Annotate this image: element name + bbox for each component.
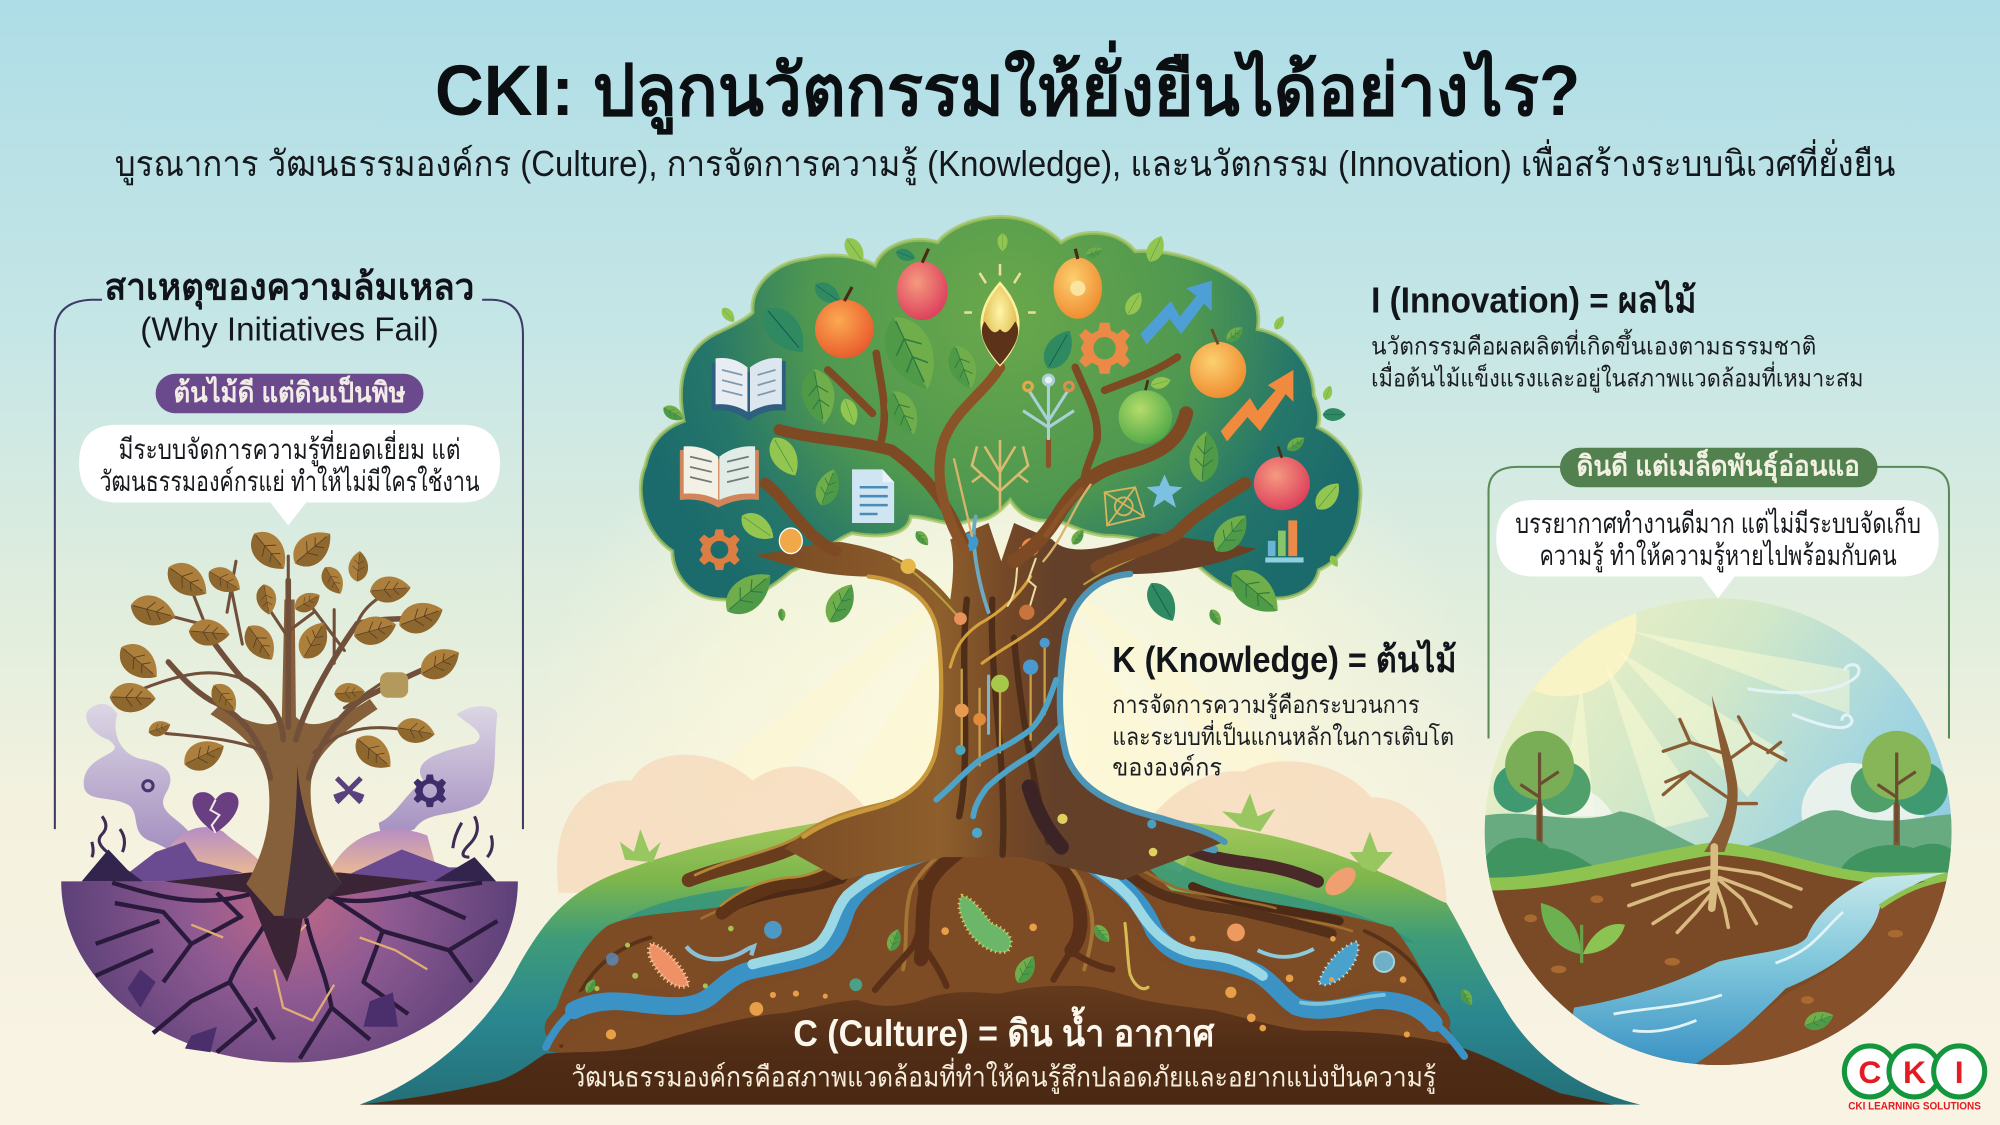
icon: crossed swords (334, 778, 364, 802)
text: knowledge: และระบบที่เป็นแกนหลักในการเติบโต (1112, 720, 1454, 751)
river right (1036, 833, 1434, 1023)
text: culture: วัฒนธรรมองค์กรคือสภาพแวดล้อมที่ทำให้คนรู้สึกปลอดภัยและอยากแบ่งปันความรู้ (571, 1058, 1436, 1095)
pill: good soil weak seed: ดินดี แต่เมล็ดพันธุ์อ่อนแอ (1577, 449, 1860, 484)
trunk shadow side (283, 765, 342, 918)
icon: gear in smoke (414, 774, 446, 807)
illustration: central CKI tree (360, 217, 1640, 1105)
pill: tree good soil toxic: ต้นไม้ดี แต่ดินเป็นพิษ (173, 375, 406, 408)
upper left root (689, 806, 893, 880)
fruit: red apple (1254, 433, 1310, 510)
blue wrap (936, 680, 1056, 800)
sky disc (1480, 593, 1958, 1071)
icon: network square (1105, 487, 1144, 526)
ground (1490, 854, 1948, 1065)
cracked soil half-disc (61, 881, 518, 1062)
river (1562, 872, 1946, 1071)
soil hill outer (360, 816, 1640, 1105)
centre roots (921, 835, 1080, 959)
panel: why initiatives fail (55, 267, 523, 1063)
tree roots (165, 872, 429, 982)
soil dark strata (561, 857, 1448, 1046)
icon: small broken symbol (143, 781, 153, 791)
roots (689, 800, 1332, 990)
logo wordmark: CKI LEARNING SOLUTIONS (1848, 1101, 1981, 1113)
icon: orange bud (779, 528, 802, 554)
toxic smoke right (379, 706, 497, 837)
microbe blue left (764, 921, 782, 939)
soil mid layer (543, 842, 1464, 1071)
text: innovation: เมื่อต้นไม้แข็งแรงและอยู่ในสภาพแวดล้อมที่เหมาะสม (1371, 361, 1864, 393)
branches (765, 353, 1245, 568)
sapling roots (1629, 847, 1801, 932)
title: CKI: ปลูกนวัตกรรมให้ยั่งยืนได้อย่างไร? (435, 40, 1580, 135)
panel: good soil weak seeds (1480, 448, 1958, 1071)
text: knowledge (1112, 638, 1457, 782)
text: culture (571, 1006, 1436, 1095)
peach hills (557, 755, 1447, 918)
toxic squiggles (92, 816, 492, 857)
fruit: orange (815, 287, 874, 358)
logo letters: K (1903, 1054, 1926, 1090)
illustration: dying tree on toxic soil (61, 522, 518, 1062)
text: culture: C (Culture) = ดิน น้ำ อากาศ (793, 1006, 1215, 1054)
golden fissures (191, 925, 427, 1020)
icon: bar chart (1265, 520, 1304, 562)
teal strip under grass (599, 835, 1416, 944)
grass strip (1480, 842, 1958, 890)
fruit: green apple (1119, 374, 1172, 444)
soil microbes and specks (583, 862, 1476, 1040)
icon: orange gear (1079, 323, 1130, 374)
second right root (1107, 857, 1332, 934)
microbe blue spot (606, 953, 619, 966)
fruit: peach (894, 246, 948, 320)
bank leaf (1804, 1012, 1834, 1030)
text: innovation (1371, 278, 1864, 393)
canopy (641, 217, 1361, 600)
right blue rim (1060, 574, 1224, 842)
trunk nodes (901, 533, 1157, 856)
light rays (689, 536, 1327, 829)
seedling (1541, 903, 1625, 963)
icon: small gear (699, 529, 740, 570)
panel heading: สาเหตุของความล้มเหลว (105, 267, 474, 311)
central glow (536, 344, 1480, 1084)
arrow left (686, 946, 754, 959)
text: knowledge: K (Knowledge) = ต้นไม้ (1112, 638, 1457, 680)
right tree (1851, 731, 1948, 848)
icon: broken heart (193, 792, 239, 833)
text: knowledge: การจัดการความรู้คือกระบวนการ (1112, 692, 1420, 720)
text: innovation: I (Innovation) = ผลไม้ (1371, 278, 1696, 320)
soil leaves (1010, 952, 1041, 987)
sun rays (1559, 631, 1849, 829)
trunk (755, 523, 1256, 880)
second left root (722, 814, 957, 913)
dark mountains (82, 849, 496, 881)
panel bracket (1489, 467, 1949, 739)
golden strand (950, 577, 1065, 667)
ring shell (1374, 952, 1394, 972)
icon: circuit tree (1023, 375, 1074, 440)
toxic smoke left (84, 704, 189, 852)
brown leaves (109, 522, 466, 777)
text: innovation: นวัตกรรมคือผลผลิตที่เกิดขึ้นเองตามธรรมชาติ (1371, 329, 1816, 361)
bushes (1480, 838, 1958, 893)
icon: open book lower (680, 446, 759, 508)
soil cracks (96, 883, 497, 1059)
speech bubble: ความรู้ ทำให้ความรู้หายไปพร้อมกับคน (1540, 539, 1897, 573)
microbe peach bean (1320, 862, 1361, 901)
speech bubble: มีระบบจัดการความรู้ที่ยอดเยี่ยม แต่ (119, 430, 460, 467)
pebbles (1524, 895, 1903, 1004)
wind swirls (1747, 665, 1859, 728)
speech bubble (79, 425, 500, 526)
branches (143, 556, 443, 778)
subtitle: บูรณาการ วัฒนธรรมองค์กร (Culture), การจัดการความรู้ (Knowledge), และนวัตกรรม (Innovation) เพื่อสร้างระบบนิเวศที่ยั่งยืน (115, 139, 1895, 185)
river bank (1696, 878, 1947, 1065)
icon: orange growth arrow (1221, 370, 1293, 441)
canopy leaves (660, 233, 1346, 628)
panel subheading: (Why Initiatives Fail) (140, 312, 439, 349)
icon: document (852, 469, 894, 523)
logo letters: C (1858, 1054, 1881, 1090)
trunk strands (804, 517, 1224, 855)
logo rings (1844, 1046, 1985, 1097)
clouds (1532, 762, 1925, 821)
left tree (1494, 731, 1591, 848)
speech bubble (1496, 500, 1939, 598)
icon: golden tree (972, 440, 1028, 510)
speech bubble: วัฒนธรรมองค์กรแย่ ทำให้ไม่มีใครใช้งาน (99, 465, 480, 497)
distant hills (151, 827, 440, 881)
main trunk (210, 599, 378, 916)
illustration: weak sapling in good soil (1484, 598, 1952, 1065)
fruit: yellow apple (1190, 323, 1246, 398)
dry sapling (1663, 695, 1786, 852)
icon: star (1147, 474, 1182, 508)
distant hills (1480, 810, 1958, 886)
microbe blue right (1319, 941, 1358, 985)
sun (1533, 614, 1636, 696)
logo: CKI (1844, 1046, 1985, 1113)
cracked mountains (117, 842, 496, 881)
fruit: pear with bulb (1054, 245, 1104, 319)
logo letters: I (1955, 1054, 1964, 1090)
icon: blue growth arrow (1140, 281, 1212, 344)
icon: open book top (712, 358, 786, 421)
upper right root (1040, 806, 1318, 881)
river highlights (1614, 912, 1843, 1032)
river left (546, 833, 1464, 1056)
grass tufts (620, 793, 1393, 872)
arrow right (1258, 949, 1314, 957)
soil specks (606, 923, 1410, 1040)
logo letters (1858, 1054, 1964, 1090)
left golden rim (804, 577, 941, 837)
soil shards (128, 969, 398, 1052)
text: knowledge: ขององค์กร (1112, 754, 1222, 782)
glowing seed (964, 264, 1036, 365)
soil base (360, 986, 1614, 1105)
microbe orange (649, 944, 689, 987)
bank grass (1880, 878, 1952, 907)
snail (1227, 923, 1245, 941)
panel bracket (55, 300, 523, 829)
microbe green (959, 895, 1011, 953)
